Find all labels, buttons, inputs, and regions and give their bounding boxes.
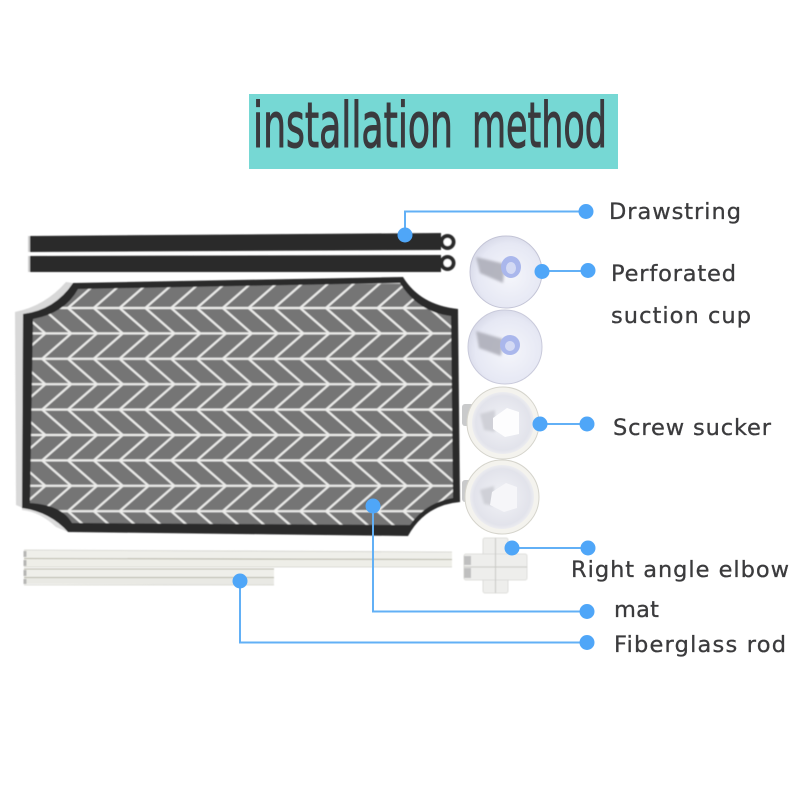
callout: Drawstring	[398, 199, 741, 242]
title banner: method	[472, 89, 607, 162]
callout: Perforated suction cup: Perforated	[611, 261, 736, 287]
icon: screw sucker, bottom	[462, 460, 539, 534]
icon: perforated suction cup, bottom	[468, 310, 542, 384]
callout: mat	[366, 498, 659, 623]
callout: Fiberglass rod	[232, 574, 786, 658]
callout: Drawstring: Drawstring	[609, 199, 741, 225]
callout: Perforated suction cup: suction cup	[611, 303, 751, 329]
mat	[15, 277, 460, 536]
callout: mat: mat	[614, 597, 659, 623]
callout: Right angle elbow: Right angle elbow	[571, 557, 789, 583]
icon: right angle elbow	[464, 538, 527, 593]
callout: Right angle elbow	[504, 540, 789, 583]
callout: Screw sucker: Screw sucker	[613, 415, 772, 441]
callout: Screw sucker	[532, 415, 772, 441]
icon: screw sucker, top	[462, 387, 539, 459]
drawstring straps	[28, 233, 454, 272]
icon: perforated suction cup, top	[470, 236, 542, 308]
fiberglass rods	[24, 550, 452, 585]
callout: Fiberglass rod: Fiberglass rod	[614, 632, 786, 658]
callout: Perforated suction cup	[534, 261, 751, 329]
title banner: installation	[253, 89, 453, 162]
